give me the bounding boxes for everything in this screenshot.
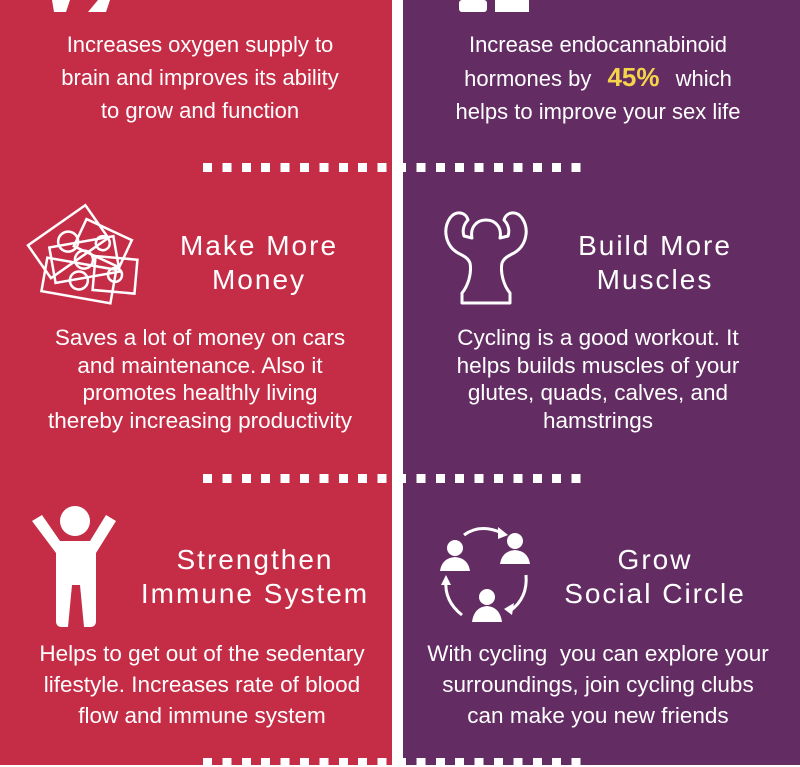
divider dots bottom: [203, 758, 588, 767]
text: immune: lifestyle. Increases rate of blood: [44, 672, 360, 697]
text: brain: to grow and function: [101, 98, 299, 123]
icon: social: [440, 527, 530, 622]
text: immune: [39, 641, 365, 728]
heading: social: Grow: [618, 544, 692, 575]
text: money: thereby increasing productivity: [48, 408, 352, 432]
divider dots: [203, 163, 588, 172]
text: social: [427, 641, 769, 728]
text: social: can make you new friends: [467, 703, 729, 728]
text: muscles: hamstrings: [543, 408, 653, 432]
text: money: Saves a lot of money on cars: [55, 325, 345, 350]
text: immune: flow and immune system: [78, 703, 326, 728]
text: muscles: Cycling is a good workout. It: [457, 325, 739, 350]
heading: muscles: Build More: [578, 230, 732, 261]
heading: immune: Strengthen: [176, 544, 334, 575]
icon: top right partial: [459, 0, 529, 12]
icon: top left partial: [52, 0, 110, 12]
text: brain: [61, 32, 339, 123]
panel: left red: [0, 0, 392, 765]
heading: social: Social Circle: [564, 578, 746, 609]
divider dots: [203, 474, 588, 483]
heading: immune: [141, 544, 369, 609]
heading: money: Money: [212, 264, 306, 295]
text: brain: brain and improves its ability: [61, 65, 339, 90]
text: hormones: helps to improve your sex life: [456, 99, 740, 124]
text: money: and maintenance. Also it: [77, 352, 323, 378]
heading: immune: Immune System: [141, 578, 369, 609]
text: immune: Helps to get out of the sedentary: [39, 641, 365, 666]
text: money: promotes healthly living: [82, 380, 318, 405]
text: muscles: glutes, quads, calves, and: [468, 380, 728, 405]
text: hormones: [456, 32, 740, 124]
heading: muscles: [578, 230, 732, 295]
text: hormones: Increase endocannabinoid: [469, 32, 727, 57]
heading: social: [564, 544, 746, 609]
heading: money: Make More: [180, 230, 338, 261]
text: muscles: helps builds muscles of your: [457, 352, 739, 378]
text: muscles: [457, 325, 739, 432]
text: brain: Increases oxygen supply to: [67, 32, 333, 57]
text: social: With cycling you can explore your: [427, 641, 769, 666]
text: social: surroundings, join cycling clubs: [442, 672, 754, 697]
heading: muscles: Muscles: [597, 264, 713, 295]
icon: money: [26, 204, 139, 305]
icon: kid: [32, 506, 116, 627]
icon: muscles: [444, 211, 528, 304]
panel: right purple: [403, 0, 800, 765]
text: hormones: hormones by 45% which: [464, 62, 732, 92]
text: money: [48, 325, 352, 432]
heading: money: [180, 230, 338, 295]
